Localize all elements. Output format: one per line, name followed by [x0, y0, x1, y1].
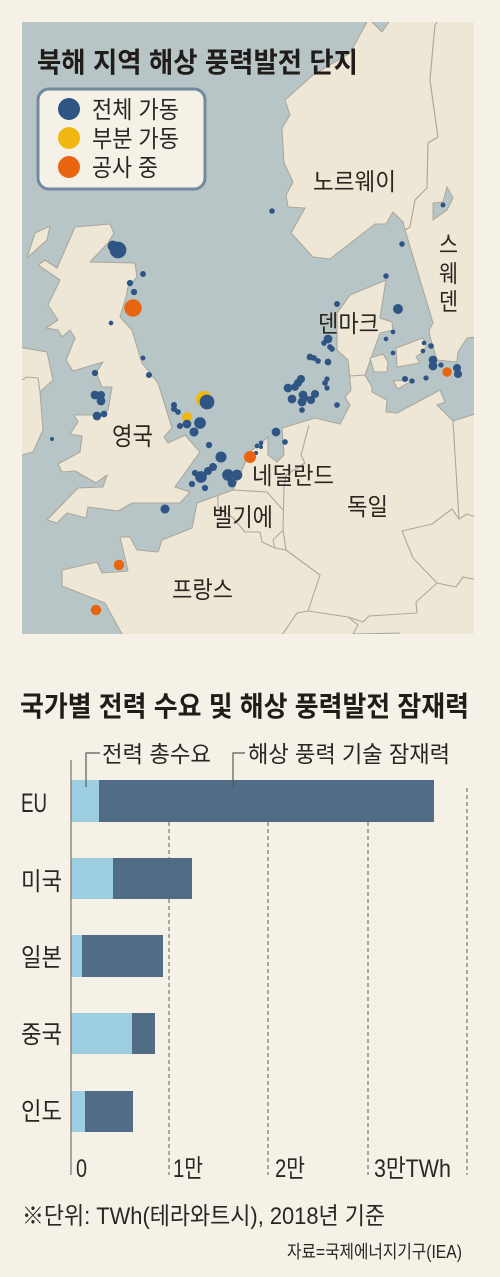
map title: 북해 지역 해상 풍력발전 단지: [37, 47, 358, 78]
source: 자료=국제에너지기구(IEA): [287, 1242, 462, 1262]
bar chart: demand and offshore wind potential: [21, 741, 467, 1183]
bar: Japan: [71, 935, 163, 977]
category labels: [21, 788, 62, 1126]
map: under-construction wind farm dots: [91, 299, 452, 615]
callout: offshore wind technical potential: [233, 741, 450, 787]
bar: China: [71, 1013, 155, 1054]
legend: full operation: [58, 97, 179, 124]
legend: under construction: [58, 155, 158, 182]
label: Belgium: 벨기에: [212, 504, 273, 532]
axis tick labels: [76, 1155, 451, 1183]
bar: USA: [71, 858, 192, 899]
axis tick labels: 2만: [275, 1155, 305, 1183]
callout: offshore wind technical potential: 해상 풍력 기술 잠재력: [248, 741, 450, 767]
callout: total electricity demand: [86, 741, 211, 787]
map: navy dots overlapping yellow: [183, 395, 214, 428]
axis: [70, 760, 72, 1175]
legend: [38, 89, 205, 189]
map: country borders: [22, 375, 478, 635]
map: partial-operation wind farm dots: [182, 391, 212, 422]
legend: partial operation: 부분 가동: [92, 126, 179, 153]
label: Denmark: 덴마크: [318, 311, 379, 338]
axis tick labels: 0: [76, 1155, 87, 1183]
map: land masses: [18, 18, 478, 640]
axis tick labels: 3만TWh: [374, 1155, 451, 1183]
chart heading: 국가별 전력 수요 및 해상 풍력발전 잠재력: [20, 691, 469, 722]
map: sea background: [22, 22, 474, 634]
label: Norway: 노르웨이: [313, 169, 396, 196]
legend: under construction: 공사 중: [92, 155, 158, 182]
category labels: EU: [21, 788, 47, 818]
label: Sweden: 스: [439, 232, 458, 259]
axis tick labels: 1만: [173, 1155, 203, 1183]
map: full-operation wind farm dots: [50, 203, 462, 513]
legend: full operation: 전체 가동: [92, 97, 179, 124]
category labels: 일본: [21, 944, 62, 972]
label: Germany: 독일: [347, 494, 388, 521]
legend: partial operation: [58, 126, 179, 153]
gridlines: [169, 788, 467, 1175]
label: France: 프랑스: [172, 577, 233, 604]
label: Sweden: [439, 232, 458, 316]
callout: total electricity demand: 전력 총수요: [102, 741, 211, 767]
label: UK: 영국: [112, 423, 153, 451]
category labels: 중국: [21, 1021, 62, 1049]
unit note: ※단위: TWh(테라와트시), 2018년 기준: [22, 1203, 385, 1230]
legend box: [38, 89, 205, 189]
label: Sweden: 웨: [439, 261, 458, 288]
bar: EU: [71, 780, 434, 822]
category labels: 미국: [21, 868, 62, 896]
category labels: 인도: [21, 1098, 62, 1126]
map labels: countries: [112, 169, 458, 604]
panel: North Sea map: [18, 18, 478, 640]
bar: India: [71, 1091, 133, 1132]
label: Netherlands: 네덜란드: [252, 463, 334, 490]
label: Sweden: 덴: [439, 289, 458, 316]
